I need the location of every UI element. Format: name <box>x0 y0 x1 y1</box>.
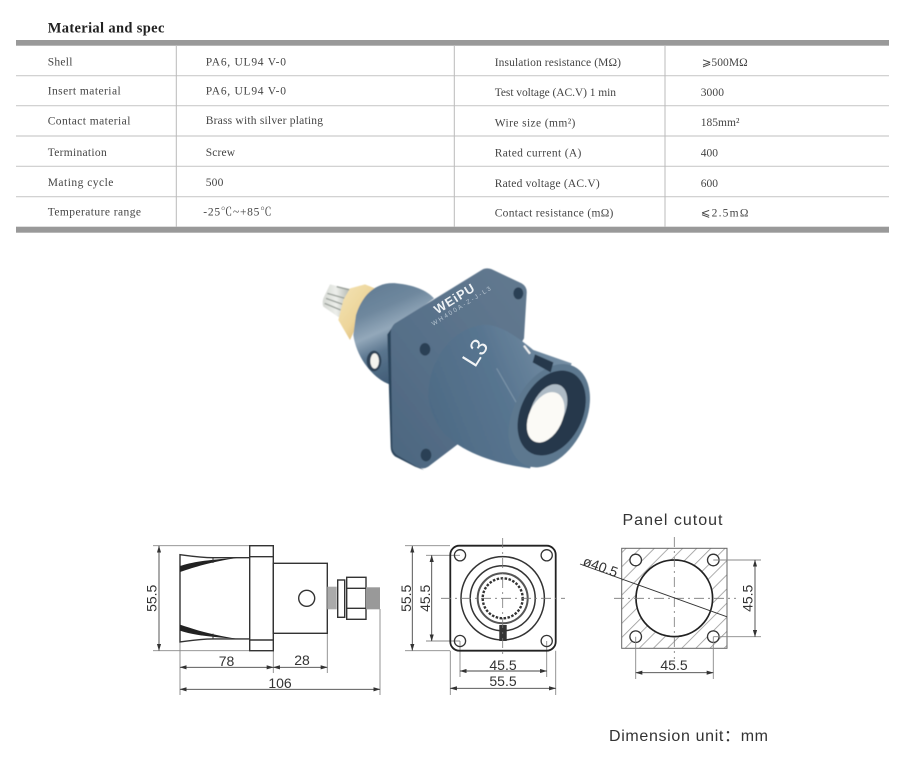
product photo: connector <box>323 268 606 481</box>
electrical column: 600 <box>701 178 718 190</box>
material column: Shell <box>48 56 72 68</box>
material column: -25℃~+85℃ <box>203 207 272 219</box>
dimension labels: 55.5 <box>398 584 414 612</box>
electrical column: ⩽2.5mΩ <box>701 208 748 220</box>
electrical column <box>495 57 748 220</box>
dimension labels: 55.5 <box>144 584 160 612</box>
material column: Termination <box>48 147 107 159</box>
material column: Mating cycle <box>48 177 113 189</box>
electrical column: Contact resistance (mΩ) <box>495 208 614 220</box>
phase label L3: L3 <box>457 335 494 372</box>
material column: 500 <box>206 177 224 189</box>
material column: Temperature range <box>48 207 141 219</box>
dimension labels: 45.5 <box>740 584 756 612</box>
drawing: side view <box>144 546 380 695</box>
material column: Screw <box>206 147 236 159</box>
material column: PA6, UL94 V-0 <box>206 56 286 68</box>
drawing: panel cutout <box>580 512 761 679</box>
drawing: front view <box>398 538 565 695</box>
electrical column: 185mm² <box>701 117 740 129</box>
dimension unit note: Dimension unit：mm <box>609 728 768 745</box>
dimension labels <box>581 553 756 673</box>
panel: specification table <box>16 40 889 233</box>
title: Material and spec <box>48 20 165 36</box>
dimension labels: 55.5 <box>489 673 517 689</box>
dimension labels: 106 <box>268 675 292 691</box>
dimension labels: 45.5 <box>489 657 517 673</box>
material column: Insert material <box>48 86 121 98</box>
electrical column: Wire size (mm²) <box>495 118 576 130</box>
dimension labels: 28 <box>294 652 310 668</box>
dimension labels: 45.5 <box>417 584 433 612</box>
panel cutout heading: Panel cutout <box>622 512 723 529</box>
material column: Brass with silver plating <box>206 115 323 127</box>
electrical column: Insulation resistance (MΩ) <box>495 57 621 69</box>
electrical column: 400 <box>701 148 718 160</box>
dimension labels <box>144 584 310 691</box>
electrical column: 3000 <box>701 87 724 99</box>
electrical column: Rated voltage (AC.V) <box>495 178 600 190</box>
dimension labels: 45.5 <box>660 657 688 673</box>
dimension labels: ø40.5 <box>581 553 620 580</box>
model text on flange: WH400A-Z-J-L3 <box>431 285 493 328</box>
material column <box>48 56 323 219</box>
dimension labels <box>398 584 517 689</box>
electrical column: Test voltage (AC.V) 1 min <box>495 87 616 99</box>
dimension labels: 78 <box>219 653 234 669</box>
brand text on flange: WEiPU <box>432 281 477 317</box>
electrical column: Rated current (A) <box>495 148 582 160</box>
material column: PA6, UL94 V-0 <box>206 86 286 98</box>
electrical column: ⩾500MΩ <box>702 57 748 69</box>
material column: Contact material <box>48 116 130 128</box>
